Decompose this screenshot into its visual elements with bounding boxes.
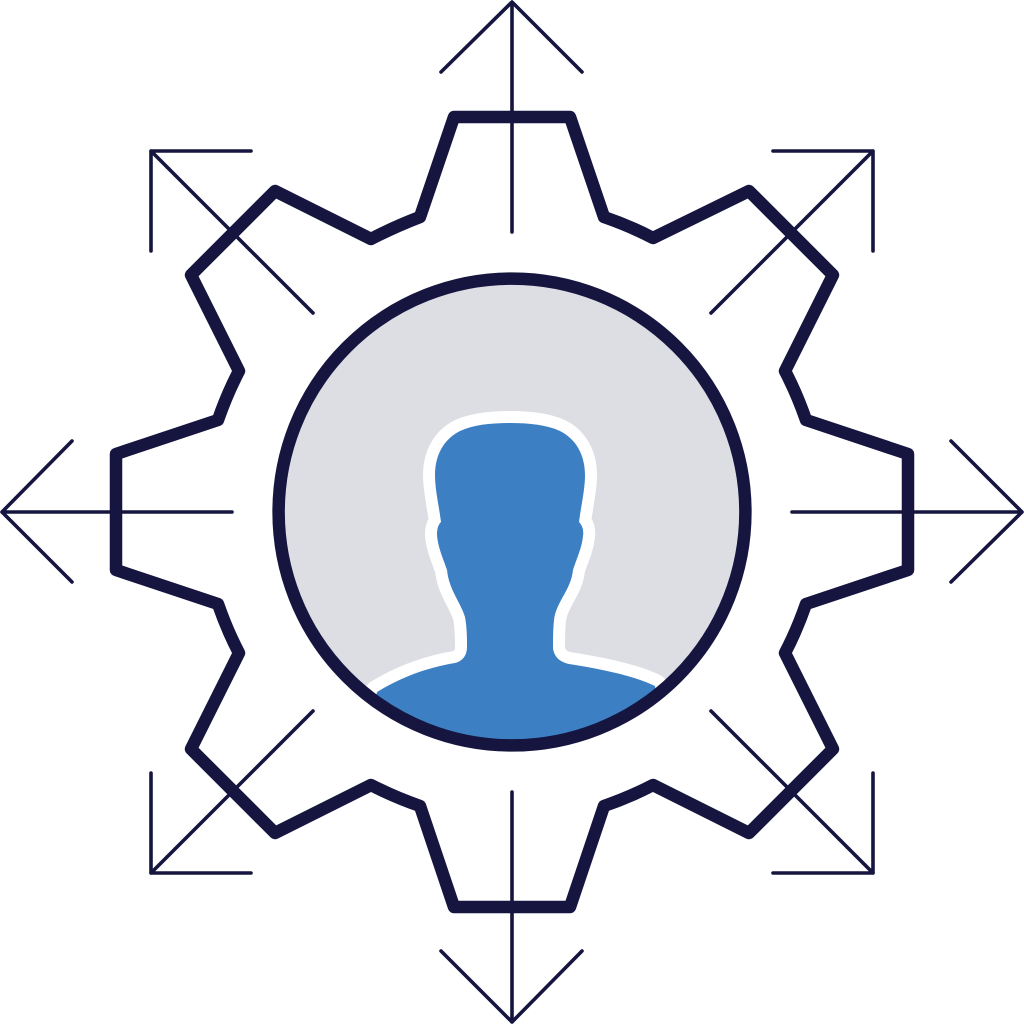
arrow: right [792,441,1022,582]
arrow: down-left [151,711,313,873]
arrow: up [441,2,582,232]
arrow: down-right [711,711,873,873]
person silhouette [360,423,670,770]
arrow: up-left [151,151,313,313]
arrow: up-right [711,151,873,313]
arrow: left [2,441,232,582]
profile circle [279,279,745,770]
arrow: down [441,792,582,1022]
gear outline [116,117,908,907]
